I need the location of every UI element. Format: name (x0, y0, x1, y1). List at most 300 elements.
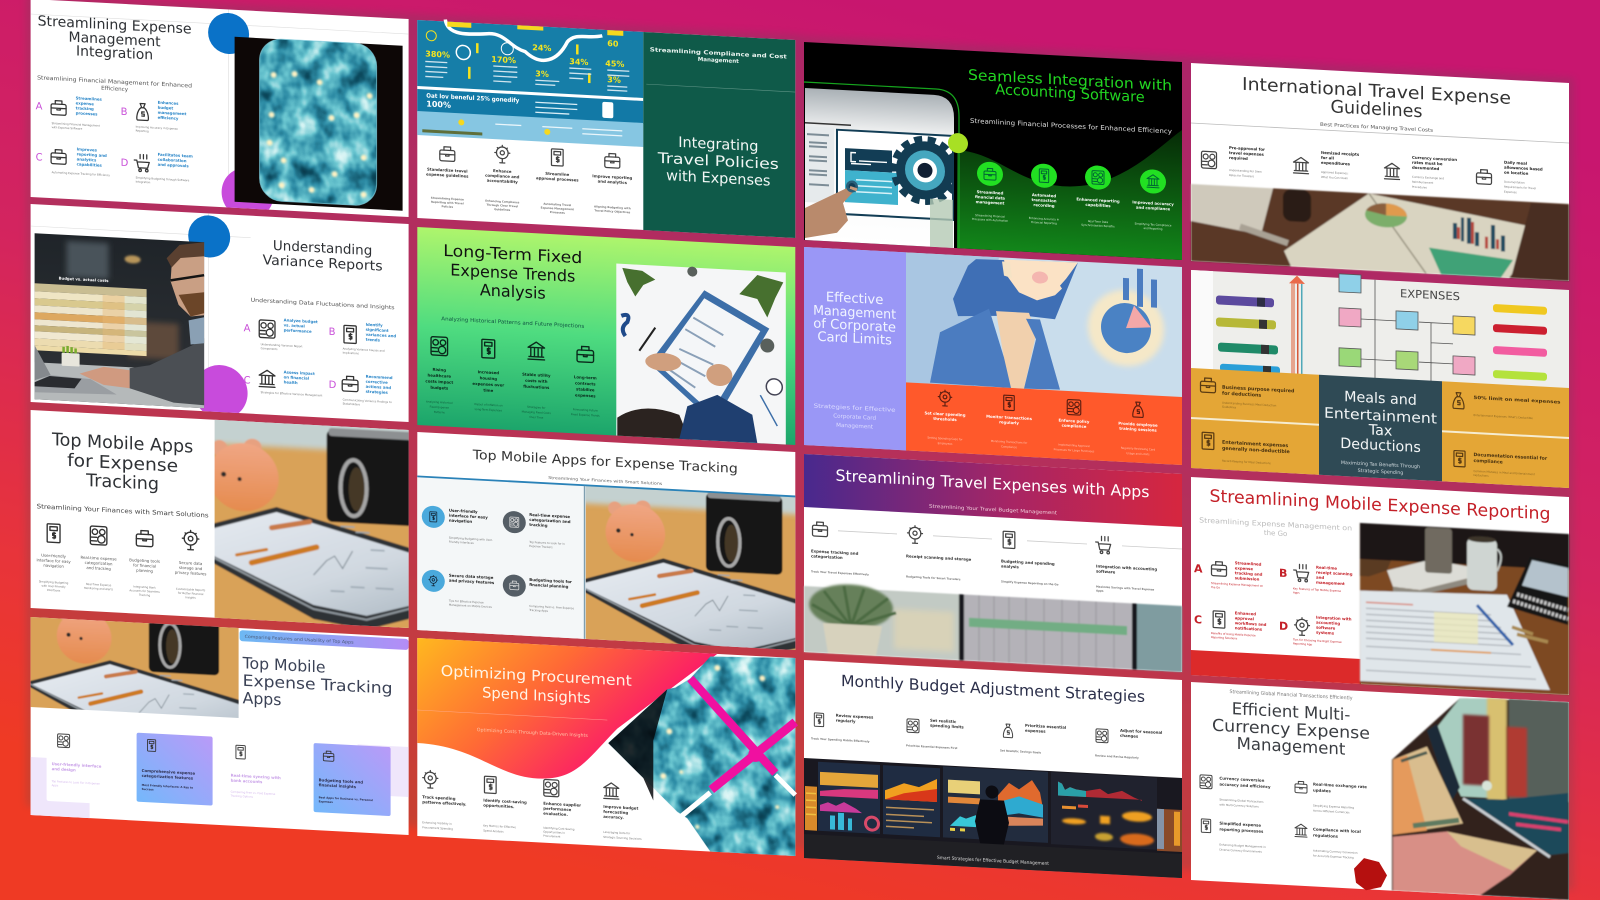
app captions: with User-Friendly (42, 584, 66, 589)
subtitle: Optimizing Costs Through Data-Driven Insights (477, 727, 588, 739)
card: categorization: Comprehensive expense (142, 768, 196, 776)
panel: Streamlining Mobile Expense Reporting (1191, 477, 1569, 695)
feature labels (449, 508, 572, 589)
step captions: Maximize Savings with Travel Expense (1096, 584, 1154, 592)
feature captions: Simplifying Budgeting with User- (449, 536, 493, 542)
guideline captions: What You Can Claim (1321, 175, 1348, 180)
item A (36, 93, 103, 132)
trend captions: Fixed Expense (430, 405, 449, 410)
policy labels: Enhance (493, 168, 512, 174)
policy labels: compliance and (485, 173, 520, 179)
card: budgeting: financial insights (319, 782, 357, 789)
app labels: Real-time expense (81, 555, 117, 562)
strategy labels: Review expenses (836, 713, 874, 720)
item D: D (329, 380, 337, 391)
guideline captions: Reimbursement (1412, 180, 1433, 185)
green side panel: Travel Policies (657, 151, 779, 173)
step captions: Budgeting Tools for Smart Travelers (906, 574, 961, 581)
panel: Meals and Entertainment Tax Deductions (1191, 266, 1569, 488)
strategy labels (422, 794, 638, 821)
left amber column: generally non-deductible (1222, 446, 1291, 455)
policy captions: Guidelines (494, 207, 511, 212)
feature labels: management (976, 199, 1005, 206)
currency labels: Currency conversion (1219, 776, 1265, 783)
strategy labels: forecasting (603, 809, 628, 815)
item A: expense (1235, 565, 1253, 571)
purple circle (200, 365, 248, 413)
guideline labels: for all (1321, 155, 1334, 161)
trend labels: costs with (525, 378, 548, 384)
item C: workflows and (1235, 620, 1267, 627)
item D: corrective (366, 379, 388, 385)
policy captions: Processes (550, 210, 565, 215)
app captions: Accounts for Seamless (129, 588, 160, 594)
trend labels: contracts (575, 380, 596, 386)
currency captions: Across Different Currencies (1313, 808, 1350, 814)
heading: Analysis (480, 280, 546, 303)
panel: Efficient Multi-Currency Expense Management (1191, 682, 1569, 900)
app captions: Integrating Bank (133, 584, 156, 590)
strategy captions: Review and Revise Regularly (1095, 753, 1139, 760)
red octagon (1354, 858, 1387, 891)
subtitle: Streamlining Global Financial Transactions Efficiently (1230, 689, 1353, 702)
item A: A (244, 323, 251, 335)
center dark title column: Tax (1368, 422, 1392, 440)
policy labels: Streamline (545, 171, 570, 177)
app captions: Monitoring and Alerts (84, 586, 114, 591)
guideline labels: allowances based (1504, 165, 1543, 172)
trend labels: Stable utility (522, 372, 551, 378)
tag bar: Comparing Features and Usability of Top Apps (245, 634, 354, 646)
guideline captions: Documentation (1504, 180, 1525, 185)
feature labels: Enhanced reporting (1076, 196, 1120, 204)
feature captions: Synchronization Benefits (1081, 223, 1115, 228)
item C: reporting and (77, 151, 107, 158)
app labels (36, 552, 206, 576)
policy captions: Reporting with Travel (431, 200, 464, 205)
heading: Monthly Budget Adjustment Strategies (841, 672, 1145, 706)
feature captions: and Reporting (1144, 226, 1163, 231)
item B: Real-time (1316, 565, 1337, 571)
item C: capabilities (77, 161, 103, 168)
item C: health (284, 379, 298, 385)
subtitle: the Go (1264, 529, 1287, 538)
step labels: Expense tracking and (811, 548, 859, 556)
trend captions: Fixed Expense Trends (571, 412, 600, 418)
app labels: and tracking (86, 565, 111, 571)
item D: Stakeholders (343, 402, 361, 406)
policy captions (431, 196, 631, 218)
guideline captions (1229, 165, 1536, 195)
strategy captions: Strategic Sourcing Decisions (603, 835, 642, 841)
orange action band: Monitor transactions (986, 414, 1033, 421)
item A: performance (284, 327, 312, 334)
currency captions: Automating Currency Conversion (1313, 848, 1358, 855)
strategy captions (811, 736, 1139, 760)
trend labels: budgets (430, 385, 449, 391)
orange action band: Processes for Large Purchases (1054, 447, 1095, 453)
heading: Understanding (273, 238, 372, 259)
trend labels: Increased (478, 369, 499, 375)
item B: B (1279, 567, 1287, 580)
guideline labels (1229, 145, 1543, 177)
item C: Assess impact (284, 369, 315, 376)
item A: Analyze budget (284, 317, 318, 324)
lavender side panel: Corporate Card (833, 414, 876, 422)
trend icons (431, 337, 594, 364)
item D: collaboration (158, 157, 187, 163)
blue circle (208, 12, 249, 55)
item C: Improves (77, 146, 98, 153)
center dark title column: Strategic Spending (1358, 468, 1403, 476)
orange action band: Enforce policy (1059, 417, 1090, 424)
policy labels: approval processes (536, 175, 579, 183)
panel: Top Mobile Expense Tracking Apps (30, 617, 409, 835)
red band (1191, 650, 1361, 684)
item B: management (158, 110, 187, 116)
trend captions: Strategies for (527, 405, 546, 410)
left amber column: Entertainment expenses (1222, 440, 1288, 449)
policy icons (440, 142, 620, 170)
currency labels: reporting processes (1219, 827, 1264, 834)
step labels: Receipt scanning and storage (906, 553, 972, 562)
panel: Top Mobile Apps for Expense Tracking (banner title) (417, 432, 796, 650)
strategy labels: performance (543, 806, 572, 812)
heading: Seamless Integration with (968, 68, 1172, 95)
item D: Reporting App (1293, 641, 1312, 646)
feature labels: Real-time expense (529, 512, 570, 519)
strategy labels (836, 713, 1162, 740)
gradient header: Streamlining Travel Expenses with Apps (835, 467, 1149, 501)
app labels: for financial (133, 562, 156, 569)
green side panel: Streamlining Compliance and Cost (650, 47, 787, 61)
currency labels: regulations (1313, 832, 1339, 839)
infographic image: Oat lov beneful 25% gonedify (426, 92, 519, 104)
app captions: Interfaces (47, 588, 61, 593)
strategy captions: Prioritize Essential Expenses First (906, 743, 958, 750)
heading: Streamlining Expense (38, 13, 192, 38)
feature captions: Processes with Automation (972, 217, 1008, 223)
app captions: Insights (185, 595, 196, 600)
green side panel: Integrating (678, 135, 758, 155)
feature labels: interface for easy (449, 513, 488, 520)
strategy labels: Identify cost-saving (483, 798, 527, 805)
heading: Guidelines (1330, 97, 1423, 122)
strategy labels: expenses (1025, 728, 1046, 734)
feature captions: Management on Mobile Devices (449, 603, 492, 609)
item A (1194, 558, 1263, 592)
currency labels: accuracy and efficiency (1219, 782, 1271, 789)
step captions (811, 569, 1154, 596)
lavender side panel: Card Limits (817, 330, 892, 349)
card: budgeting (314, 743, 391, 816)
app labels: storage and (179, 565, 203, 571)
item D: Recommend (366, 374, 393, 380)
photo: whiteboard flowchart with markers: EXPENSES (1400, 287, 1460, 303)
photo: phone and toy (586, 486, 796, 650)
item B: Improving Accuracy in Expense (136, 125, 178, 131)
subtitle: Streamlining Financial Management for Enhanced (37, 75, 193, 90)
trend labels: time (483, 388, 494, 393)
strategy labels: regularly (836, 718, 856, 724)
feature captions: Streamlining Financial (975, 213, 1005, 219)
feature labels: capabilities (1085, 202, 1111, 208)
item B: variances and (366, 332, 396, 338)
guideline labels: Daily meal (1504, 160, 1527, 166)
center dark title column (1319, 375, 1442, 481)
strategy captions (422, 819, 642, 843)
trend labels (425, 366, 597, 399)
feature: syncing (230, 745, 281, 800)
right amber column: Common Mistakes in Meal and Entertainment (1474, 469, 1535, 476)
trend labels: stabilize (576, 386, 595, 392)
strategy labels: Adjust for seasonal (1120, 728, 1162, 735)
guideline captions: Rates for Travelers (1229, 173, 1255, 178)
heading: Efficient Multi- (1232, 699, 1350, 724)
panel: Streamlining Travel Expenses with Apps (804, 454, 1182, 672)
step captions: Simplify Expense Reporting on the Go (1001, 579, 1059, 586)
guideline captions: Currency Exchange and (1412, 175, 1444, 180)
orange action band: Compliance (1001, 444, 1017, 449)
heading: Expense Tracking (243, 671, 393, 698)
heading: International Travel Expense (1242, 75, 1511, 109)
strategy captions: Enhancing Visibility in (422, 820, 452, 826)
strategy labels: Improve budget (603, 804, 638, 811)
feature: user-friendly: and design (52, 766, 76, 772)
item B: and (1316, 575, 1324, 580)
app captions: Tracking (138, 593, 150, 597)
feature captions: Financial Reporting (1031, 220, 1057, 225)
item A: tracking and (1235, 570, 1263, 577)
currency captions: Simplifying Expense Reporting (1313, 803, 1354, 810)
item B (121, 98, 187, 135)
photo: currency notes and phone (1392, 693, 1569, 900)
currency icons (1200, 775, 1307, 838)
feature captions: Tips for Effective Expense (448, 599, 484, 605)
panel: Effective Management of Corporate Card Limits (804, 247, 1182, 465)
item C: Strategies for Effective Variance Management (261, 390, 322, 397)
subtitle: Efficiency (101, 86, 129, 93)
item C (36, 144, 110, 177)
infographic image: 380% (425, 49, 450, 60)
photo: phone and toy (214, 420, 409, 628)
item A: vs. actual (284, 322, 305, 329)
card: categorization (137, 733, 213, 806)
app labels: navigation (43, 563, 64, 569)
orange action band: Set clear spending (925, 410, 966, 418)
feature: user-friendly: Apps (52, 783, 59, 787)
item C: Benefits of Using Mobile Expense (1211, 631, 1256, 637)
panel: Long-Term Fixed Expense Trends Analysis (417, 227, 795, 445)
item D: Communicating Variance Findings to (343, 398, 392, 404)
item A: Streamlining Expense Management on (1211, 581, 1263, 588)
app labels: User-friendly (41, 553, 67, 559)
center dark title column: Deductions (1340, 436, 1421, 456)
item B: efficiency (158, 115, 179, 121)
feature captions: Comparing Paid vs. Free Expense (529, 604, 574, 610)
item B (329, 320, 396, 357)
step labels: analysis (1001, 563, 1020, 569)
left amber column: Guidelines (1222, 405, 1237, 409)
blue rule (417, 476, 795, 497)
right amber column: Entertainment Expenses: What's Deductible (1474, 413, 1533, 420)
heading: Accounting Software (995, 82, 1145, 106)
item D: Facilitates team (158, 152, 193, 159)
step connectors (838, 531, 1182, 549)
item C: Automating Expense Tracking for Efficiency (52, 170, 110, 177)
feature: user-friendly: Top Features to Look For in Expense (51, 779, 100, 786)
item D: and approvals (158, 162, 189, 168)
strategy captions: Key Metrics for Effective (483, 824, 516, 829)
policy labels: expense guidelines (426, 171, 469, 179)
item C: approval (1235, 615, 1254, 621)
infographic image (417, 18, 643, 147)
item D: systems (1316, 630, 1335, 636)
heading: for Expense (67, 451, 178, 477)
feature circles (422, 505, 526, 597)
feature labels: transaction (1031, 197, 1057, 203)
heading: Spend Insights (482, 684, 591, 707)
item B: Implications (343, 351, 359, 355)
strategy labels: evaluation. (543, 811, 568, 817)
policy captions: Enhancing Compliance (485, 199, 520, 204)
policy captions: Expense Management (541, 206, 575, 211)
guideline captions: Requirements for Travel (1504, 185, 1536, 190)
app captions: Customizable Reports (176, 587, 206, 592)
item A: the Go (1211, 585, 1220, 590)
center dark title column: Entertainment (1324, 406, 1437, 428)
panel: Top Mobile Apps for Expense Tracking (large title) (30, 410, 409, 628)
currency captions: with Multi-Currency Solutions (1219, 803, 1259, 809)
panel: Seamless Integration with Accounting Software (804, 42, 1182, 260)
center dark title column: Maximizing Tax Benefits Through (1341, 460, 1420, 470)
item C: C (244, 375, 251, 387)
card: budgeting: Expenses (319, 799, 333, 804)
item B: Key Features of Top Mobile Expense (1293, 586, 1341, 593)
photo: expense sheet on a desk (1360, 523, 1569, 695)
feature captions: Real-Time Data (1088, 219, 1109, 224)
feature: syncing: Tracking Options (230, 794, 254, 799)
app labels: privacy features (175, 570, 206, 576)
currency labels (1219, 776, 1367, 840)
icon circles (977, 159, 1166, 195)
currency labels: updates (1313, 787, 1331, 793)
guideline labels: Currency conversion (1412, 155, 1457, 162)
panel: Streamlining Expense Management Integration (31, 0, 409, 228)
strategy captions: Spend Analysis (483, 829, 504, 834)
left amber column (1191, 368, 1319, 475)
heading: Tracking (85, 471, 159, 495)
step captions: Apps (1096, 588, 1104, 593)
pale decorative blocks (31, 727, 409, 835)
strategy labels: Set realistic (930, 718, 957, 724)
orange action band: compliance (1062, 423, 1087, 429)
feature: user-friendly: User-friendly interface (52, 761, 102, 769)
lavender side panel: of Corporate (813, 316, 896, 336)
orange action band: Provide employee (1118, 421, 1158, 428)
policy labels: and analytics (598, 179, 628, 185)
item D (121, 150, 193, 187)
gradient header: Streamlining Your Travel Budget Management (929, 504, 1057, 516)
currency captions: Streamlining Global Transactions (1219, 798, 1264, 804)
tag bar (240, 630, 409, 650)
blue circle (188, 214, 230, 259)
policy labels (426, 164, 633, 190)
trend labels: expenses (575, 392, 596, 398)
orange action band (906, 382, 1182, 465)
item A (244, 315, 318, 353)
feature labels: Secure data storage (449, 573, 494, 580)
photo: analyst with budget table (35, 233, 204, 408)
feature: syncing: Real-time syncing with (231, 773, 281, 780)
lavender side panel: Strategies for Effective (814, 404, 896, 414)
strategy labels: spending limits (930, 723, 964, 730)
app labels: planning (136, 568, 154, 574)
gradient swoop (417, 638, 717, 788)
item B: budget (158, 105, 173, 111)
feature captions (972, 213, 1172, 231)
step labels: Integration with accounting (1096, 563, 1157, 572)
infographic image: 100% (426, 99, 451, 110)
lavender side panel: Management (813, 303, 896, 323)
app icons (47, 523, 199, 550)
orange action band: Usage and Limits (1126, 451, 1150, 456)
item D (329, 372, 393, 408)
trend captions: Analyzing Historical (426, 399, 453, 405)
step labels: software (1096, 568, 1116, 575)
photo: analyst at dashboard wall: Smart Strategies for Effective Budget Management (937, 855, 1049, 867)
step labels: categorization (811, 553, 843, 560)
item B: B (329, 327, 336, 338)
currency captions (1219, 798, 1358, 860)
currency captions: Diverse Currency Environments (1219, 848, 1263, 854)
heading: Apps (243, 688, 281, 709)
subtitle: Analyzing Historical Patterns and Future Projections (441, 316, 585, 330)
policy captions: Travel Policy Objectives (594, 208, 631, 214)
item C: C (36, 152, 43, 164)
feature labels (975, 189, 1174, 215)
trend labels: housing (480, 375, 497, 381)
center dark title column: Meals and (1344, 389, 1417, 409)
app captions: Real-Time Expense (86, 582, 112, 587)
card: categorization: Most Friendly Interfaces: A Key to (142, 783, 193, 790)
trend captions: Patterns (434, 410, 445, 414)
item D: D (1279, 620, 1288, 633)
photo: office window and plant (804, 582, 1182, 672)
orange action band: Implementing Approval (1058, 442, 1090, 448)
feature labels: and privacy features (449, 578, 495, 585)
item D: Tips for Choosing the Right Expense (1292, 637, 1342, 644)
item B: Analyzing Variance Causes and (343, 347, 385, 353)
heading: Expense Trends (450, 260, 575, 286)
panel: Monthly Budget Adjustment Strategies (804, 660, 1182, 878)
feature labels: tracking (529, 522, 548, 528)
guideline labels: expenditures (1321, 160, 1351, 166)
card: categorization: Success (142, 787, 154, 792)
item A: Understanding Variance Report (261, 342, 303, 348)
right amber column: Deductions (1474, 473, 1489, 478)
orange action band: Setting Spending Caps for (927, 436, 963, 441)
feature captions: Expense Trackers (529, 544, 553, 549)
infographic image: 60 (607, 39, 619, 49)
strategy captions: Procurement (543, 834, 560, 839)
feature captions: Friendly Interfaces (449, 540, 474, 545)
feature labels: Automated (1032, 192, 1056, 198)
panel: Optimizing Procurement Spend Insights (417, 638, 795, 856)
heading: Management (1237, 734, 1346, 759)
item A: Streamlined (1235, 560, 1262, 567)
heading: Optimizing Procurement (441, 663, 632, 690)
